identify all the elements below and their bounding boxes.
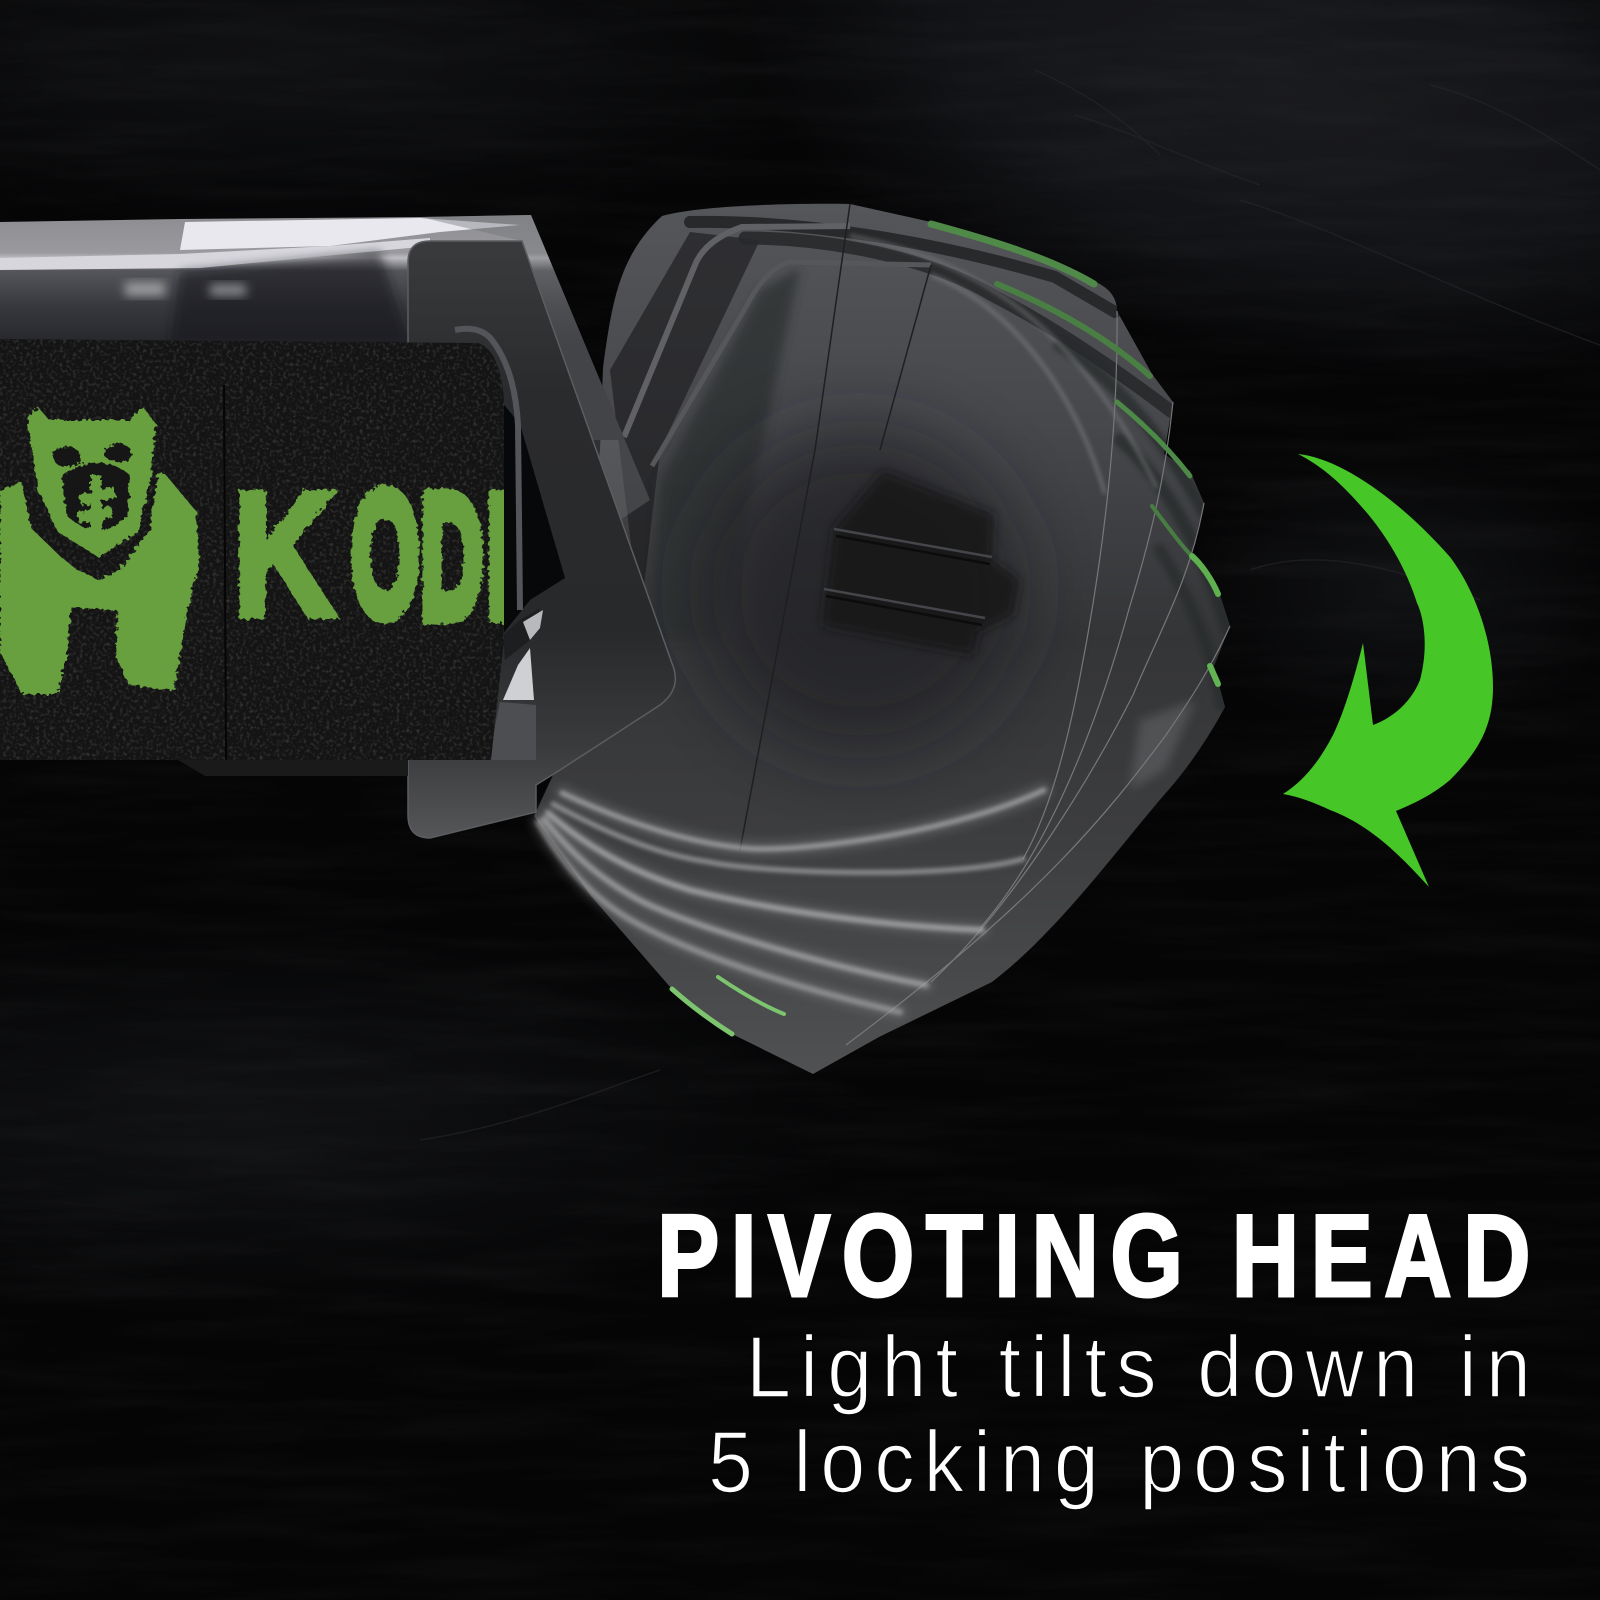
body text: tilt description: Light tilts down in: [746, 1318, 1531, 1416]
layer edges on right side: [846, 311, 1230, 1045]
heading: PIVOTING HEAD: PIVOTING HEAD: [657, 1191, 1531, 1321]
KODI wordmark on strap: D: [420, 459, 484, 655]
icon: green curved arrow pointing down: [1283, 454, 1493, 887]
dark bracket plate: [408, 241, 675, 838]
green edge accents: [672, 224, 1218, 1034]
KODI wordmark on strap: [237, 484, 504, 626]
clear outer shell: [420, 215, 650, 520]
KODI wordmark on strap: K: [233, 456, 335, 653]
bear logo on strap: [0, 407, 199, 694]
head shading and highlights: [610, 232, 1196, 790]
body text: tilt description: 5 locking positions: [708, 1413, 1530, 1511]
slot ring: [455, 329, 520, 610]
head silhouette: [534, 204, 1230, 1074]
front vent slots: [822, 471, 1020, 655]
pivot bracket: [408, 215, 675, 838]
inner rim strips: [624, 204, 1157, 850]
dark banded top strips: [690, 222, 1228, 705]
lower rib glow: [538, 790, 1044, 1012]
KODI wordmark on strap: O: [351, 457, 419, 653]
elastic strap: [0, 335, 510, 776]
body text: tilt description: [708, 1318, 1531, 1511]
KODI wordmark on strap: I: [486, 459, 510, 655]
lower ribs: [538, 790, 1044, 1012]
bracket window: [498, 400, 565, 640]
buckle reflections: [488, 608, 543, 760]
headlamp: overlapping head positions: [534, 204, 1230, 1074]
clear headband holder: [0, 215, 625, 440]
